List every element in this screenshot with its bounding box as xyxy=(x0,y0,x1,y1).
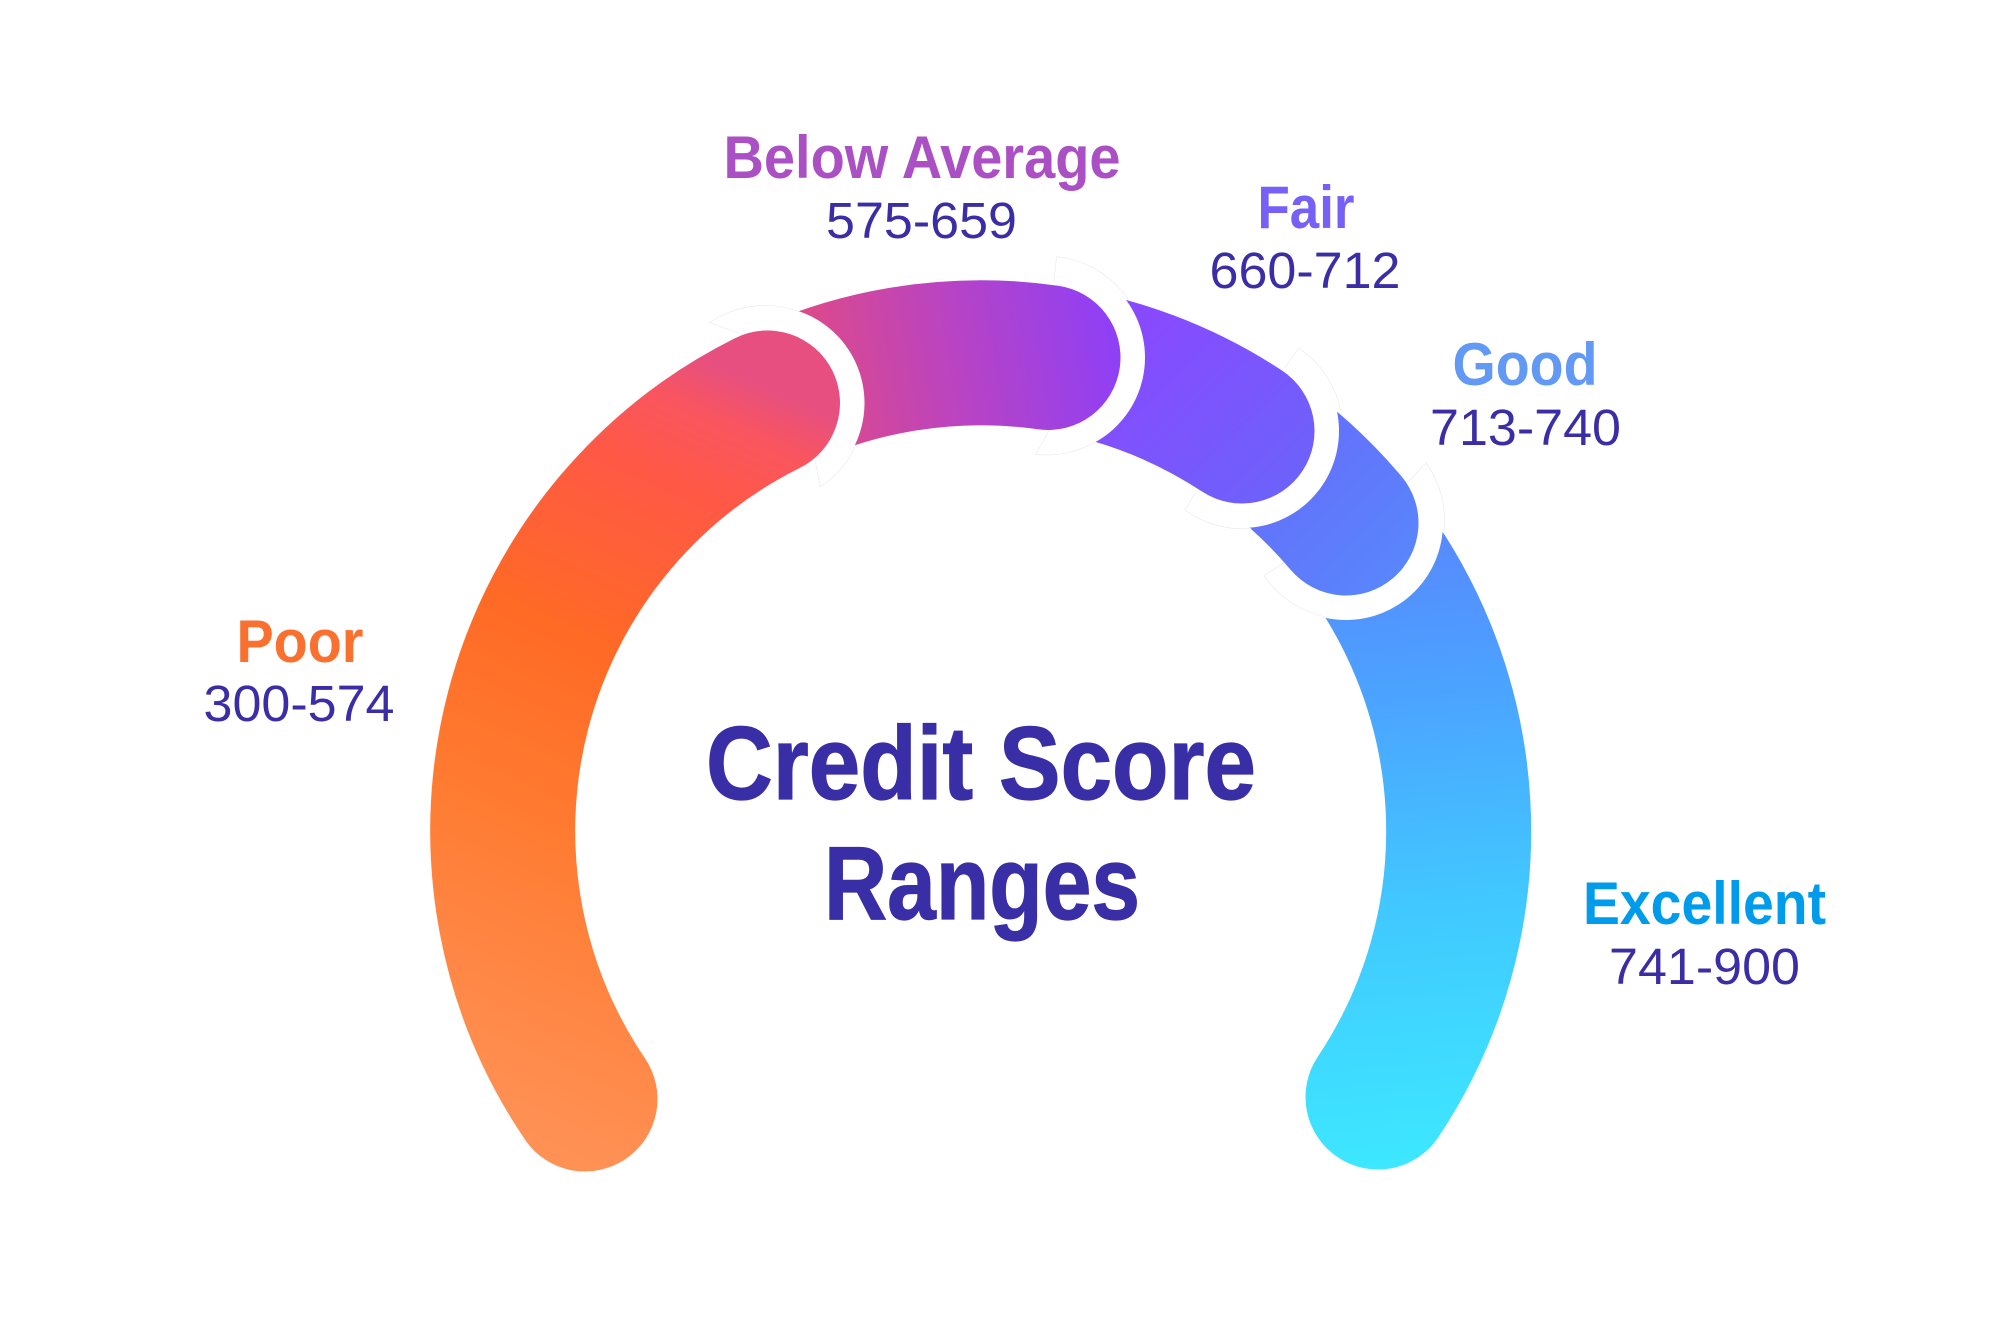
label: good: 713-740 xyxy=(1430,399,1621,456)
label: below average xyxy=(724,124,1120,249)
label: poor: 300-574 xyxy=(204,675,394,732)
label: below average: 575-659 xyxy=(826,192,1017,249)
label: excellent: Excellent xyxy=(1583,870,1826,937)
segment: below average xyxy=(768,353,1048,403)
label: excellent xyxy=(1583,870,1826,995)
label: excellent: 741-900 xyxy=(1609,938,1800,995)
white ring: fair xyxy=(1145,334,1341,529)
label: below average: Below Average xyxy=(724,124,1120,191)
label: fair xyxy=(1210,174,1400,299)
white ring: poor xyxy=(670,305,864,500)
title: Ranges xyxy=(824,826,1140,942)
segment: good xyxy=(1242,431,1346,523)
label: good xyxy=(1430,331,1621,456)
segment: fair xyxy=(1048,358,1242,431)
gauge arc xyxy=(503,257,1459,1099)
label: poor: Poor xyxy=(236,608,364,675)
white ring: good xyxy=(1249,426,1445,620)
segment: poor xyxy=(503,403,768,1099)
segment: excellent xyxy=(1346,523,1459,1097)
title: Credit Score xyxy=(706,706,1256,822)
label: fair: Fair xyxy=(1258,174,1354,241)
white ring: below average xyxy=(951,257,1145,455)
label: fair: 660-712 xyxy=(1210,242,1400,299)
label: good: Good xyxy=(1452,331,1598,398)
title xyxy=(706,706,1256,942)
label: poor xyxy=(204,608,394,732)
